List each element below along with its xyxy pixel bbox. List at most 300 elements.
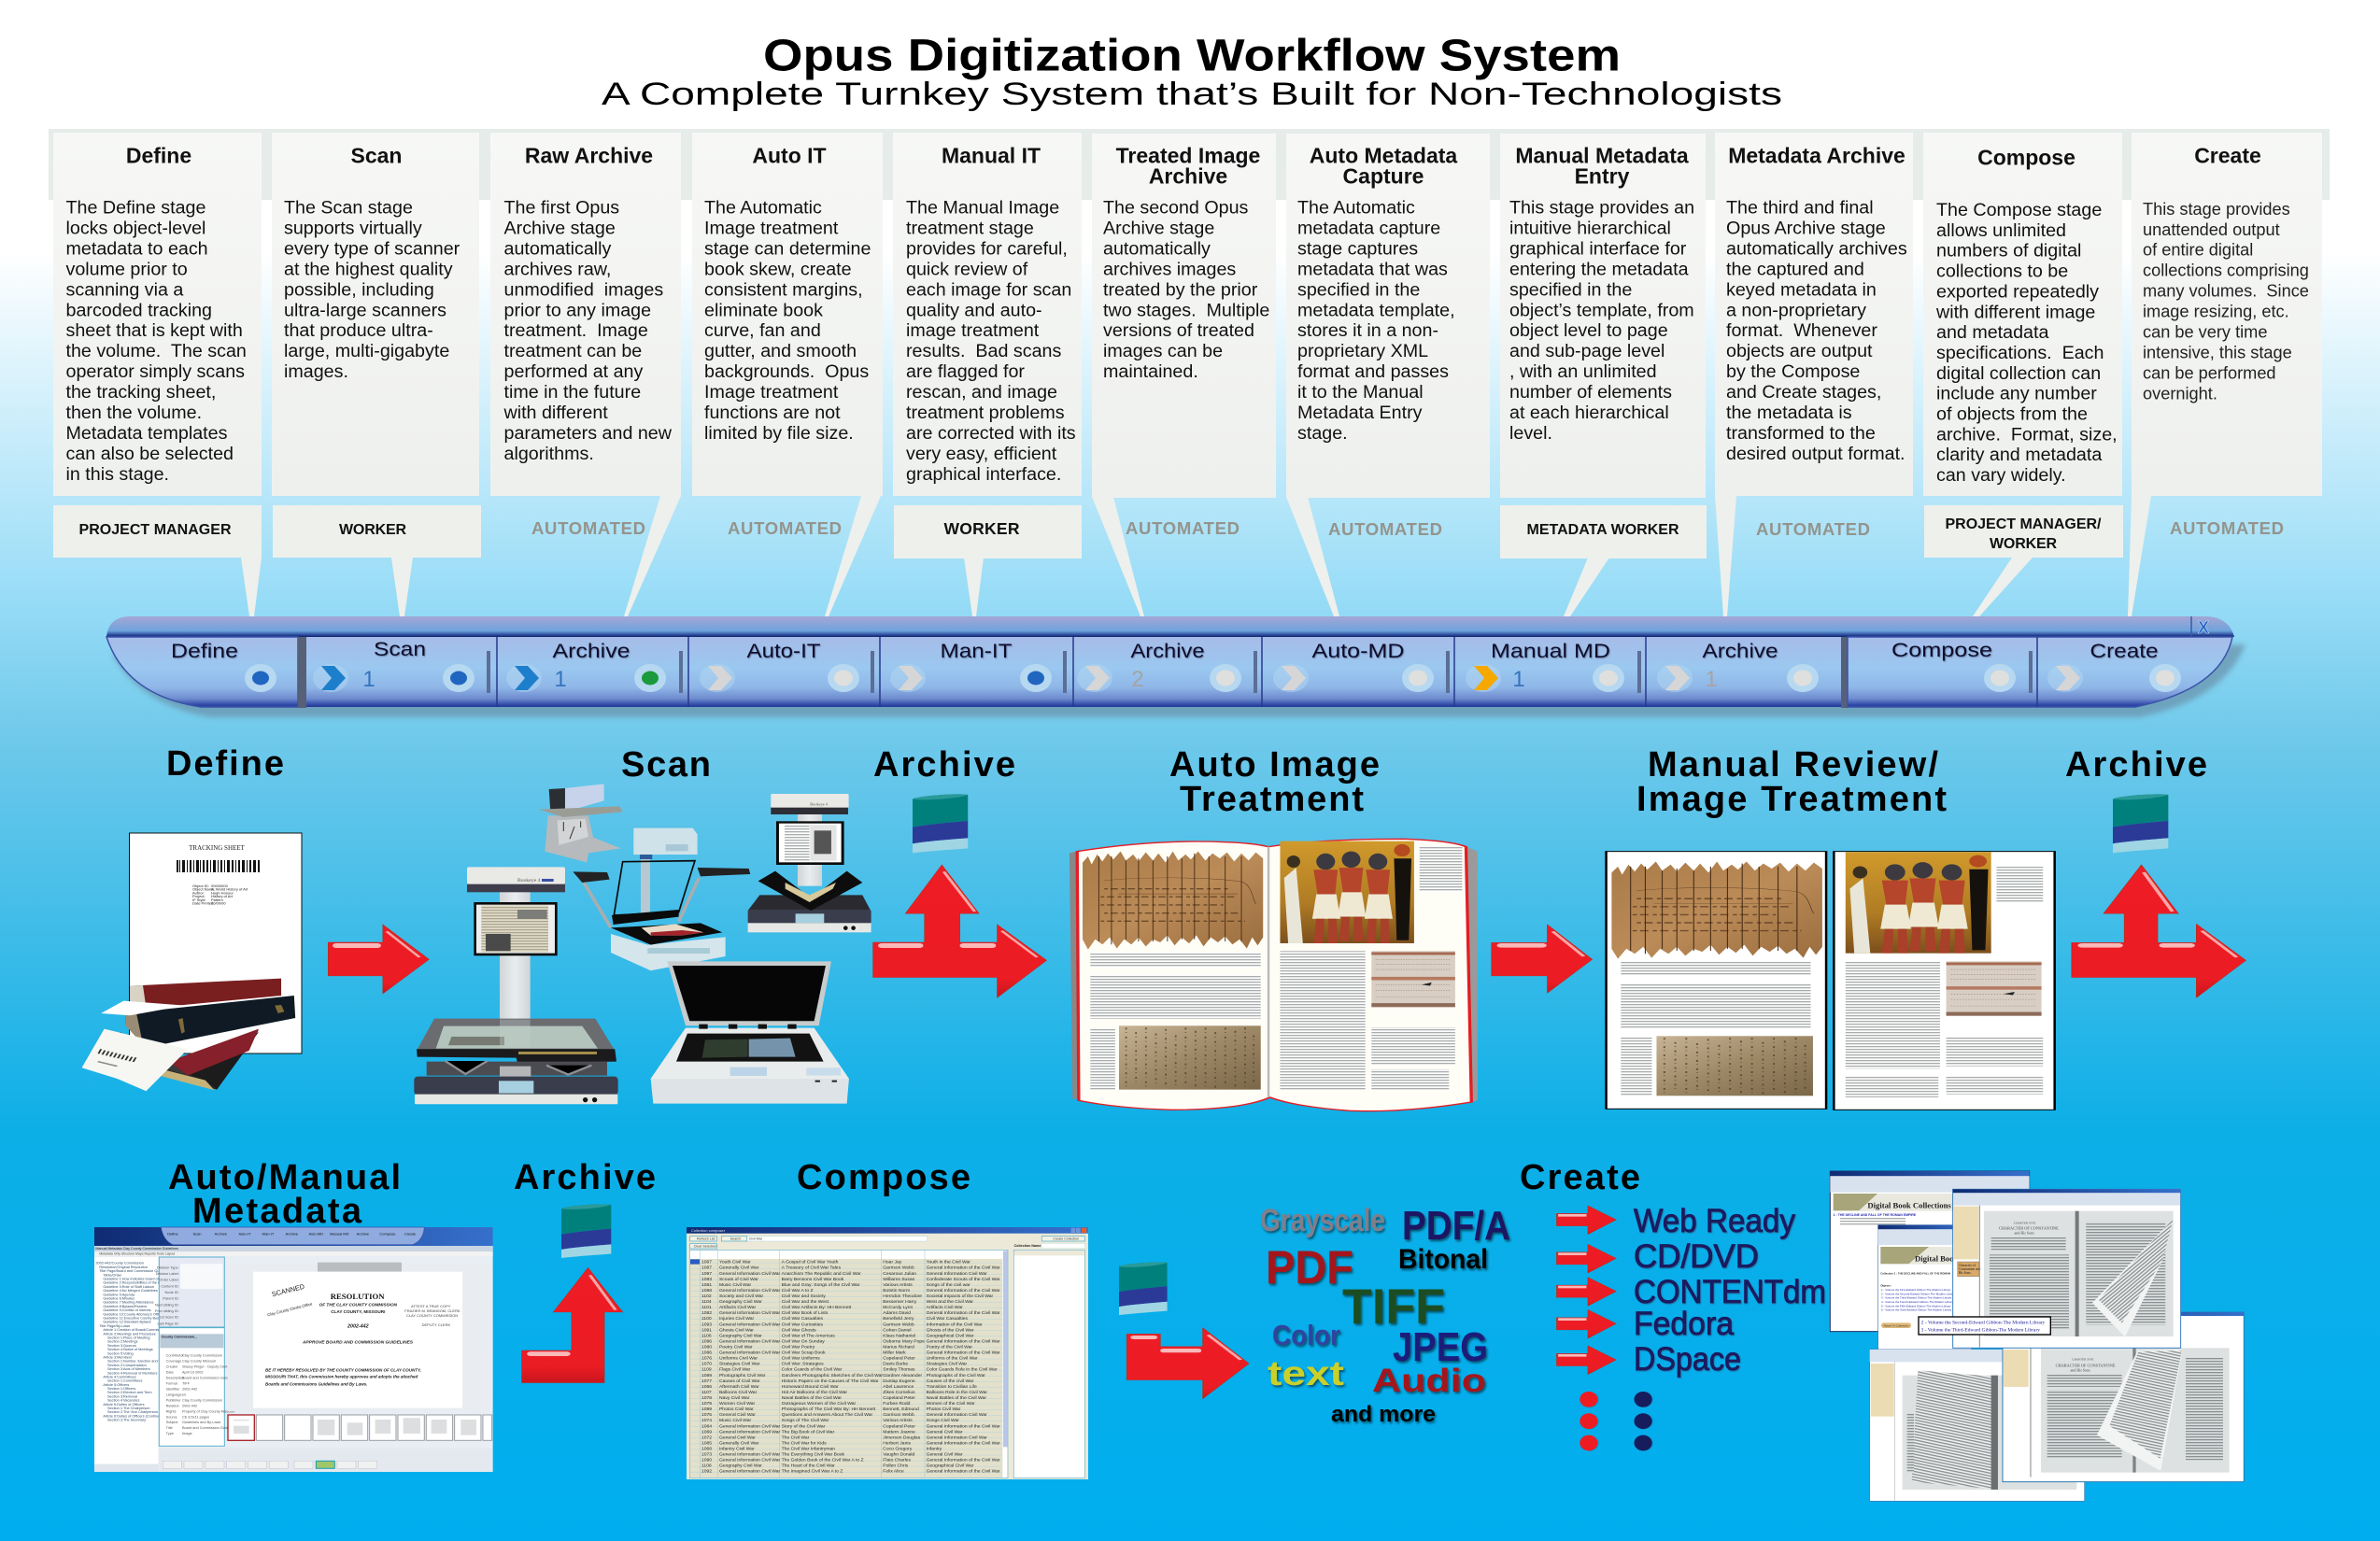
compose screenshot: A Treasury of Civil War Tales — [782, 1265, 842, 1271]
metadata screenshot: Language — [166, 1393, 182, 1396]
heading: Create: Create — [1520, 1158, 1640, 1197]
compose screenshot: Civil War A to Z — [782, 1288, 814, 1294]
browser window: open book — [1953, 1189, 2181, 1348]
compose screenshot: Civil War Curiosities — [782, 1322, 824, 1327]
metadata screenshot: April 19 2002 — [182, 1371, 204, 1375]
compose screenshot: General Civil War — [927, 1452, 963, 1458]
panel: Compose: clarity and metadata — [1936, 445, 2102, 465]
panel: Treated Image Archive: treated by the prior — [1103, 279, 1258, 300]
panel: Manual Metadata Entry: specified in the — [1509, 279, 1632, 300]
compose screenshot: 1066 — [701, 1384, 712, 1390]
metadata screenshot: Article 5:Officers — [103, 1383, 129, 1387]
compose screenshot: General Civil War — [927, 1429, 963, 1435]
compose screenshot: Civil War Casualties — [782, 1316, 824, 1322]
panel: Manual Metadata Entry: , with an unlimited — [1509, 361, 1657, 382]
browser window: page spread — [2003, 1312, 2244, 1482]
compose screenshot: Strategies Civil War — [719, 1362, 760, 1367]
output formats word cloud — [1260, 1203, 1510, 1427]
browser window: volumes: 5 - Volume the Fifth-Edward Gibbon-The Modern Library — [1881, 1304, 1951, 1308]
panel: Manual Metadata Entry: object’s template, from — [1509, 300, 1694, 320]
metadata screenshot: Parent ID: — [163, 1297, 179, 1301]
panel: Auto IT: gutter, and smooth — [704, 341, 857, 361]
panel: Manual IT: rescan, and image — [906, 382, 1057, 403]
panel: Compose: exported repeatedly — [1936, 281, 2099, 302]
heading: Archive: Archive — [873, 745, 1015, 785]
panel: Create: can be very time — [2143, 323, 2267, 342]
arrow: Auto IT to Manual — [1492, 925, 1593, 993]
compose screenshot: General Information Civil War — [927, 1435, 987, 1440]
panel: Compose: numbers of digital — [1936, 241, 2081, 262]
compose screenshot: Collection composer — [691, 1228, 726, 1233]
panel: Manual IT: WORKER — [943, 519, 1020, 538]
panel: Metadata Archive: the metadata is — [1726, 403, 1852, 423]
compose screenshot: Project — [719, 1252, 730, 1256]
compose screenshot: Youth Civil War — [719, 1260, 751, 1265]
panel: Compose: with different image — [1935, 302, 2095, 322]
panel: Treated Image Archive: archives images — [1103, 259, 1236, 279]
compose screenshot: 1102 — [701, 1294, 712, 1299]
compose screenshot: General Information Civil War — [927, 1271, 987, 1277]
compose screenshot: Gardner Alexander — [883, 1373, 922, 1378]
panel: Define: PROJECT MANAGER — [78, 522, 232, 538]
compose screenshot: Infantry Civil War — [719, 1447, 755, 1452]
panel: Metadata Archive — [1715, 133, 1913, 616]
panel: Define — [53, 133, 262, 616]
heading: Manual Review / Image Treatment: Manual Review/ — [1648, 745, 1938, 785]
compose screenshot: Naval Battles of the Civil War — [927, 1395, 986, 1401]
metadata screenshot: 2002-442 — [347, 1324, 369, 1330]
metadata screenshot: Section 2:The Vice Chairperson — [107, 1410, 158, 1414]
panel: Metadata Archive: a non-proprietary — [1726, 300, 1866, 320]
panel: Auto Metadata Capture: Capture — [1343, 164, 1424, 189]
compose screenshot: Flags Civil War — [719, 1367, 751, 1373]
compose screenshot: General Information of the Civil War — [927, 1469, 1000, 1475]
output formats word cloud: Grayscale — [1260, 1203, 1385, 1238]
panel: Treated Image Archive: versions of treated — [1103, 320, 1254, 341]
compose screenshot: 1086 — [701, 1350, 712, 1356]
metadata screenshot: Section 1:Committees — [107, 1379, 143, 1383]
close button: X — [2198, 618, 2209, 637]
delivery targets: Fedora — [1634, 1306, 1735, 1342]
metadata screenshot: Stacey Pinger - Deputy Clerk — [182, 1365, 228, 1369]
compose screenshot: Marius Richard — [883, 1345, 914, 1350]
panel: Scan — [272, 133, 481, 616]
panel: Manual Metadata Entry: intuitive hierarchical — [1509, 218, 1671, 238]
small delivery arrows — [1557, 1206, 1616, 1375]
panel: Auto Metadata Capture: The Automatic — [1297, 198, 1415, 219]
compose screenshot: General Information Civil War — [719, 1271, 781, 1277]
metadata screenshot: Source — [166, 1415, 177, 1419]
compose screenshot: General Information Civil War — [719, 1452, 781, 1458]
panel: Auto IT: Image treatment — [704, 218, 839, 238]
browser window: volumes: Collection 1 : THE DECLINE AND FALL OF THE ROMAN — [1880, 1272, 1950, 1276]
panel: Treated Image Archive: maintained. — [1103, 361, 1198, 382]
panel: Manual Metadata Entry: This stage provides an — [1509, 198, 1694, 219]
metadata screenshot: Order Label: — [159, 1279, 179, 1282]
scanner: Bookeye 4 with cradle: Bookeye 4 — [810, 802, 829, 807]
compose screenshot: Injuries Civil War — [719, 1316, 755, 1322]
panel: Auto Metadata Capture: Auto Metadata — [1310, 144, 1457, 168]
metadata screenshot: Relation — [166, 1404, 179, 1407]
arrow: Manual split — [2072, 865, 2245, 997]
panel: Raw Archive: time in the future — [504, 382, 641, 403]
compose screenshot: 1074 — [701, 1418, 712, 1423]
compose screenshot: General Information of the Civil War — [927, 1423, 1000, 1429]
panel: Treated Image Archive: AUTOMATED — [1126, 518, 1240, 538]
metadata screenshot: Guideline 12:Standard Bylaws — [103, 1321, 151, 1324]
panel: Manual Metadata Entry: Manual Metadata — [1515, 144, 1689, 168]
output formats word cloud: Bitonal — [1398, 1244, 1488, 1275]
compose screenshot: Pollen Chris — [883, 1463, 909, 1469]
metadata screenshot: Article 6:Duties of Officers — [103, 1403, 145, 1407]
metadata screenshot — [94, 1227, 493, 1472]
heading: Auto Image Treatment: Auto Image — [1169, 745, 1380, 785]
toolbar labels: Manual MD — [1491, 641, 1610, 662]
panel: Manual IT: image treatment — [906, 320, 1040, 341]
panel: Define: Metadata templates — [65, 423, 228, 444]
arrow: Define to Scan — [328, 925, 429, 994]
tooltip: volume list — [1919, 1317, 2050, 1335]
compose screenshot: Music Civil War — [719, 1418, 751, 1423]
compose screenshot: General Civil War — [719, 1412, 756, 1418]
compose screenshot: Poetry of the Civil War — [927, 1345, 972, 1350]
compose screenshot: General Information Civil War — [719, 1322, 781, 1327]
heading: Auto Image Treatment — [1169, 745, 1380, 819]
delivery targets: DSpace — [1634, 1341, 1741, 1378]
compose screenshot: 1091 — [701, 1327, 712, 1333]
title: Opus Digitization Workflow System — [763, 32, 1621, 80]
heading: Define: Define — [166, 744, 284, 784]
compose screenshot: Photos Civil War — [927, 1407, 961, 1412]
panel: Create: Create — [2194, 144, 2261, 168]
panel: Define: barcoded tracking — [65, 300, 212, 320]
panel: Raw Archive: with different — [503, 403, 608, 423]
compose screenshot: General Information Civil War — [719, 1288, 781, 1294]
panel: Auto IT: consistent margins, — [704, 279, 863, 300]
panel: Scan: supports virtually — [284, 218, 422, 238]
compose screenshot: 1076 — [701, 1356, 712, 1362]
compose screenshot: Society and Civil War — [719, 1294, 764, 1299]
metadata screenshot: Boards and Commissions Guidelines and By Laws. — [265, 1381, 367, 1386]
compose screenshot: The Civil War for Kids — [782, 1440, 827, 1446]
panel: Compose: of objects from the — [1936, 404, 2088, 425]
metadata screenshot: CLAY COUNTY COMMISSION — [406, 1313, 458, 1318]
compose screenshot: Jimerson Douglas — [883, 1435, 921, 1440]
compose screenshot: Civil War — [749, 1237, 763, 1241]
panel: Auto Metadata Capture: AUTOMATED — [1328, 519, 1442, 539]
panel: Scan: that produce ultra- — [284, 320, 433, 341]
compose screenshot: Aftermath Civil War — [719, 1384, 759, 1390]
panel: Auto Metadata Capture: format and passes — [1297, 361, 1449, 382]
compose screenshot: Herbert Janis — [883, 1440, 911, 1446]
compose screenshot: General Information Civil War — [719, 1338, 781, 1344]
compose screenshot: Generally Civil War — [719, 1440, 759, 1446]
panel: Create: many volumes. Since — [2143, 282, 2309, 301]
metadata screenshot: Date — [166, 1371, 174, 1375]
metadata screenshot: Section 3:Quorum — [107, 1344, 136, 1348]
metadata screenshot: FRAZIER M. BRANSOM, CLERK — [404, 1308, 460, 1313]
compose screenshot: Infantry — [927, 1447, 942, 1452]
metadata screenshot: Article 6:Duties of Officers (Continued) — [103, 1414, 164, 1418]
panel: Raw Archive: automatically — [504, 238, 612, 259]
panel: Define: The Define stage — [65, 198, 205, 219]
panel: Compose: Compose — [1977, 146, 2075, 170]
compose screenshot: Zikes Cornelius — [883, 1390, 915, 1395]
panel: Manual Metadata Entry: Entry — [1575, 164, 1630, 189]
step counts: 2 — [1131, 667, 1144, 692]
panel: Compose: specifications. Each — [1936, 343, 2104, 363]
database: Treated Archive — [2113, 794, 2168, 853]
compose screenshot: 1084 — [701, 1423, 712, 1429]
compose screenshot: Scouts of Civil War — [719, 1277, 758, 1282]
compose screenshot: Hot Air Balloons of the Civil War — [782, 1390, 847, 1395]
panel: Auto Metadata Capture: specified in the — [1297, 279, 1420, 300]
metadata screenshot: Section 4:Vacancies — [107, 1399, 139, 1403]
browser window: collections — [1830, 1171, 2030, 1332]
metadata screenshot: APPROVE BOARD AND COMMISSION GUIDELINES — [302, 1340, 414, 1346]
compose screenshot: General Information Civil War — [719, 1310, 781, 1316]
panel: Scan: images. — [284, 361, 348, 382]
panel: Scan: WORKER — [339, 522, 406, 538]
compose screenshot: General Information Civil War — [927, 1412, 987, 1418]
panel: Manual IT: are flagged for — [906, 361, 1025, 382]
compose screenshot: Williams Susan — [883, 1277, 915, 1282]
compose screenshot: 1096 — [701, 1338, 712, 1344]
metadata screenshot: Guideline 1:How indicates board of Commission — [103, 1277, 179, 1280]
compose screenshot: Ghosts of the Civil War — [927, 1327, 974, 1333]
metadata screenshot: Section 3:Acts of Members — [107, 1367, 150, 1371]
compose screenshot: Transition to Civilian Life — [927, 1384, 977, 1390]
heading: Auto/Manual Metadata — [168, 1158, 401, 1231]
compose screenshot: Songs of The Civil War — [782, 1418, 829, 1423]
metadata screenshot: Property of Clay County Missouri — [182, 1409, 234, 1413]
metadata screenshot: Format — [166, 1381, 178, 1385]
toolbar labels: Compose — [1891, 640, 1992, 661]
browser window: open book: and His Sons — [2015, 1231, 2034, 1236]
compose screenshot: Women of the Civil War — [927, 1401, 975, 1407]
compose screenshot: 1075 — [701, 1412, 712, 1418]
metadata screenshot: Coverage — [166, 1360, 181, 1364]
compose screenshot: Herndon Theodore — [883, 1294, 922, 1299]
metadata screenshot: Section 2:Meetings — [107, 1340, 138, 1344]
browser window: page spread: and His Sons — [2071, 1367, 2090, 1372]
panel: Auto Metadata Capture: stage captures — [1297, 238, 1418, 259]
panel: Create: can be performed — [2143, 363, 2276, 382]
metadata screenshot: Compose — [379, 1232, 396, 1237]
metadata screenshot: en — [182, 1393, 186, 1396]
panel: Manual Metadata Entry: level. — [1509, 423, 1552, 444]
panel: Define: locks object-level — [65, 218, 205, 238]
tooltip: volume list: 3 - Volume the Third-Edward Gibbon-The Modern Library — [1921, 1328, 2040, 1334]
compose screenshot: The Civil War Infantryman — [782, 1447, 835, 1452]
tracking sheet: Project: — [192, 894, 205, 898]
metadata screenshot: Division Label: — [156, 1272, 179, 1276]
metadata screenshot: Guideline 5:Agenda — [103, 1293, 135, 1296]
metadata screenshot: Section 1:Number, Election and Vacancies — [107, 1360, 175, 1364]
panel: Manual IT: treatment problems — [906, 403, 1065, 423]
panel: Create: intensive, this stage — [2143, 343, 2292, 361]
panel: Create: AUTOMATED — [2170, 518, 2284, 538]
metadata screenshot: Auto-IT — [238, 1232, 251, 1237]
compose screenshot: Photographs Civil War — [719, 1373, 766, 1378]
tracking sheet: IF Style: — [192, 898, 206, 902]
metadata screenshot: Section 3:Removal — [107, 1394, 137, 1398]
compose screenshot: 1090 — [701, 1458, 712, 1463]
panel: Manual Metadata Entry: and sub-page level — [1509, 341, 1665, 361]
panel: Define: metadata to each — [65, 238, 208, 259]
metadata screenshot: Manual MD — [330, 1232, 349, 1237]
tracking sheet: Object Name: — [192, 887, 215, 892]
compose screenshot: 1104 — [701, 1299, 712, 1305]
metadata screenshot: Article 3:Members — [103, 1355, 132, 1359]
compose screenshot: Balloons Role in the Civil War — [927, 1390, 987, 1395]
delivery targets — [1634, 1203, 1826, 1378]
panel: Manual IT — [893, 133, 1082, 616]
compose screenshot: Outrageous Women of the Civil War — [782, 1401, 857, 1407]
heading: Manual Review / Image Treatment: Image Treatment — [1636, 780, 1947, 819]
compose screenshot: General Information of the Civil War — [927, 1288, 1000, 1294]
compose screenshot: Cesarous Julian — [883, 1271, 916, 1277]
compose screenshot: General Information Civil War — [719, 1350, 781, 1356]
toolbar labels: Archive — [1702, 641, 1778, 662]
panel: Metadata Archive: desired output format. — [1726, 444, 1905, 464]
metadata screenshot: Guidelines and By-Laws — [182, 1421, 220, 1424]
metadata screenshot: Manual Metadata Clay County Commission Guidelines — [95, 1247, 178, 1251]
output formats word cloud: TIFF — [1342, 1279, 1445, 1335]
metadata screenshot: Article 1:Creation of Board/Commission — [103, 1328, 165, 1332]
metadata screenshot: Prev sibling ID: — [155, 1309, 179, 1313]
panel: Metadata Archive: Metadata Archive — [1728, 144, 1905, 168]
compose screenshot: Civil War Ghosts — [782, 1327, 816, 1333]
panel: Manual IT: results. Bad scans — [906, 341, 1061, 361]
barcode — [177, 860, 260, 872]
browser window: open book: CHARACTER OF CONSTANTINE — [1999, 1226, 2059, 1231]
metadata screenshot: Table/Order — [103, 1273, 122, 1277]
panel: Manual Metadata Entry: at each hierarchical — [1509, 403, 1669, 423]
panel: Compose: collections to be — [1936, 262, 2068, 282]
compose screenshot: Klaus Nathaniel — [883, 1333, 915, 1338]
panel: Treated Image Archive: two stages. Multiple — [1103, 300, 1269, 320]
scanner: Bookeye 4 with cradle — [748, 794, 871, 932]
panel: Raw Archive: Raw Archive — [525, 144, 653, 168]
panel: Treated Image Archive: The second Opus — [1103, 198, 1249, 219]
metadata screenshot: Section 1:Place of Meeting — [107, 1336, 150, 1339]
metadata screenshot: DEPUTY CLERK — [422, 1322, 450, 1327]
toolbar labels: Archive — [553, 641, 630, 662]
panel: Metadata Archive: the captured and — [1726, 259, 1864, 279]
output formats word cloud: PDF — [1266, 1241, 1353, 1294]
compose screenshot: Balloons Civil War — [719, 1390, 758, 1395]
compose screenshot: Create Collection — [1053, 1237, 1079, 1241]
output formats word cloud: text — [1268, 1354, 1344, 1393]
panel: Metadata Archive: automatically archives — [1726, 238, 1907, 259]
status orbs — [245, 664, 2181, 692]
compose screenshot: Smiley Thomas — [883, 1367, 915, 1373]
heading: Auto Image Treatment: Treatment — [1180, 780, 1364, 819]
metadata screenshot: Node ID: — [165, 1291, 179, 1294]
compose screenshot: General Information of the Civil War — [927, 1338, 1000, 1344]
browser window: collections: Digital Book Collections — [1867, 1200, 1951, 1209]
metadata screenshot: County Commission... — [162, 1336, 197, 1339]
scanner: Bookeye 4 large: Bookeye 4 — [517, 878, 541, 884]
compose screenshot: 1100 — [701, 1316, 712, 1322]
browser window: page spread: CHARACTER OF CONSTANTINE — [2056, 1363, 2116, 1367]
panel: Metadata Archive: by the Compose — [1726, 361, 1860, 382]
metadata screenshot: Subject — [166, 1421, 178, 1424]
compose screenshot: Questions and Answers About The Civil War — [782, 1412, 873, 1418]
compose screenshot: 1077 — [701, 1378, 712, 1384]
compose screenshot: Societal Impacts of the Civil War — [927, 1294, 994, 1299]
browser window: skewed page — [1870, 1350, 2085, 1501]
panel: Auto Metadata Capture — [1286, 134, 1490, 616]
panel: Create: of entire digital — [2143, 241, 2253, 260]
compose screenshot: Civil War: Strategies — [782, 1362, 824, 1367]
compose screenshot: Civil War and the West — [782, 1299, 829, 1305]
compose screenshot: Detail — [692, 1252, 701, 1256]
compose screenshot: Story of the Civil War — [782, 1423, 826, 1429]
panel: Auto Metadata Capture: metadata template, — [1297, 300, 1455, 320]
compose screenshot: Color Guards Role in the Civil War — [927, 1367, 998, 1373]
compose screenshot: Bennett, Edmund — [883, 1407, 919, 1412]
tracking sheet: Hugh Honour — [211, 890, 234, 895]
panel: Auto IT: stage can determine — [704, 238, 871, 259]
compose screenshot: Artifacts Civil War — [927, 1305, 963, 1310]
compose screenshot: General Information of the Civil War — [927, 1440, 1000, 1446]
panel: Raw Archive: treatment can be — [504, 341, 642, 361]
compose screenshot: The Everything Civil War Book — [782, 1452, 845, 1458]
metadata screenshot: Identifier — [166, 1387, 180, 1391]
heading: Scan: Scan — [621, 745, 711, 785]
panel: Define: the tracking sheet, — [65, 382, 216, 403]
panel: Manual IT: are corrected with its — [906, 423, 1076, 444]
compose screenshot: 1081 — [701, 1282, 712, 1288]
panel: Create — [2128, 133, 2322, 616]
compose screenshot — [687, 1227, 1088, 1479]
panel: Auto Metadata Capture: metadata that was — [1297, 259, 1448, 279]
compose screenshot: 1078 — [701, 1395, 712, 1401]
metadata screenshot: Title — [166, 1426, 173, 1430]
compose screenshot: The Heart of the Civil War — [782, 1463, 835, 1469]
toolbar labels: Archive — [1130, 641, 1205, 662]
database: Metadata Archive — [561, 1204, 611, 1258]
compose screenshot: West and the Civil War — [927, 1299, 973, 1305]
metadata screenshot: Section 4:Removal of Members — [107, 1371, 157, 1375]
metadata screenshot: Section 1:Officers — [107, 1387, 135, 1391]
metadata screenshot: Board and Commission Guidelines — [182, 1377, 237, 1380]
panel: Compose: WORKER — [1990, 536, 2057, 552]
compose screenshot: Dunlap Eugene — [883, 1378, 915, 1384]
close button — [2191, 616, 2209, 637]
tracking sheet: History of Art — [211, 894, 234, 898]
compose screenshot: Flato Charles — [883, 1458, 911, 1463]
compose screenshot: The Big Book of Civil War — [782, 1429, 835, 1435]
compose screenshot: Photographs of the Civil War — [927, 1373, 985, 1378]
panel: Auto IT: Auto IT — [752, 144, 827, 168]
panel: Compose: include any number — [1936, 384, 2097, 404]
compose screenshot: Benefield Jerry — [883, 1316, 914, 1322]
metadata screenshot: Guideline 6:Minutes — [103, 1296, 135, 1300]
panel: Treated Image Archive: images can be — [1103, 341, 1223, 361]
step chevrons — [313, 664, 2083, 692]
compose screenshot: Collection Name: — [1014, 1244, 1042, 1248]
compose screenshot: Copeland Peter — [883, 1356, 915, 1362]
compose screenshot: The Imagined Civil War A to Z — [782, 1469, 843, 1475]
compose screenshot: 1099 — [701, 1407, 712, 1412]
metadata screenshot: Resolution/Original Resolution — [99, 1265, 148, 1269]
compose screenshot: 1092 — [701, 1469, 712, 1475]
metadata screenshot: CLAY COUNTY, MISSOURI — [331, 1309, 385, 1314]
compose screenshot: Creator — [883, 1252, 895, 1256]
